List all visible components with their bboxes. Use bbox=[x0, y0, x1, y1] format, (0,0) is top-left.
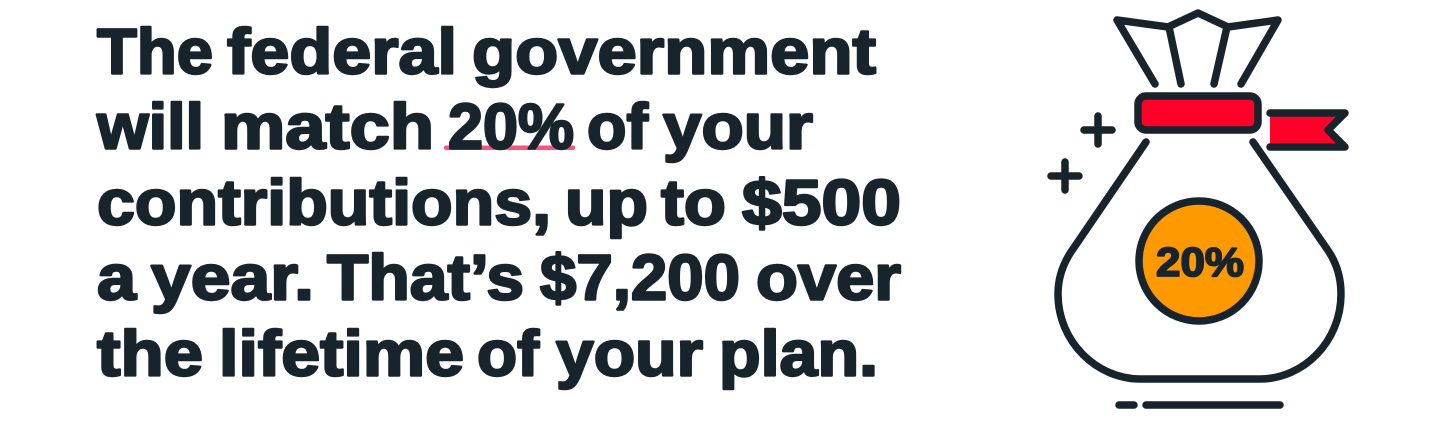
text line 5: plan. bbox=[719, 318, 878, 390]
text line 4: over bbox=[756, 242, 901, 314]
text line 2: will bbox=[96, 90, 204, 162]
red band bbox=[1138, 96, 1258, 130]
plus sparkle lower bbox=[1051, 162, 1079, 190]
text line 3: $500 bbox=[742, 166, 901, 238]
text line 1: government bbox=[472, 16, 876, 88]
bag top gathered fabric bbox=[1117, 13, 1278, 84]
text line 4: $7,200 bbox=[540, 242, 740, 314]
text line 3: to bbox=[661, 166, 726, 238]
text line 4: That’s bbox=[327, 242, 524, 314]
ground lines bbox=[1119, 401, 1280, 409]
text line 2: match bbox=[221, 90, 434, 162]
bag body outline bbox=[1058, 142, 1341, 379]
text line 3 bbox=[97, 166, 901, 238]
text line 2 bbox=[96, 90, 813, 162]
text line 3: contributions, bbox=[97, 166, 551, 238]
red ribbon flag bbox=[1270, 113, 1345, 147]
text line 5: your bbox=[556, 318, 703, 390]
text line 2: of bbox=[587, 90, 649, 162]
text line 3: up bbox=[565, 166, 648, 238]
text line 2: your bbox=[663, 90, 813, 162]
text line 1 bbox=[97, 16, 876, 88]
text line 4: year. bbox=[151, 242, 314, 314]
text line 5: the bbox=[97, 318, 203, 390]
text line 1: The bbox=[97, 16, 213, 88]
orange 20% coin bbox=[1139, 201, 1259, 321]
text line 5 bbox=[97, 318, 878, 390]
plus sparkle upper bbox=[1084, 116, 1112, 144]
underline highlight under 20% bbox=[444, 146, 575, 150]
orange 20% coin: 20% bbox=[1156, 239, 1244, 285]
text block: federal match message bbox=[96, 16, 901, 390]
text line 2: 20% bbox=[448, 90, 574, 162]
text line 4 bbox=[97, 242, 901, 314]
text line 4: a bbox=[97, 242, 136, 314]
text line 1: federal bbox=[227, 16, 457, 88]
text line 5: lifetime bbox=[219, 318, 464, 390]
icon: money bag bbox=[1051, 13, 1345, 405]
text line 5: of bbox=[477, 318, 540, 390]
